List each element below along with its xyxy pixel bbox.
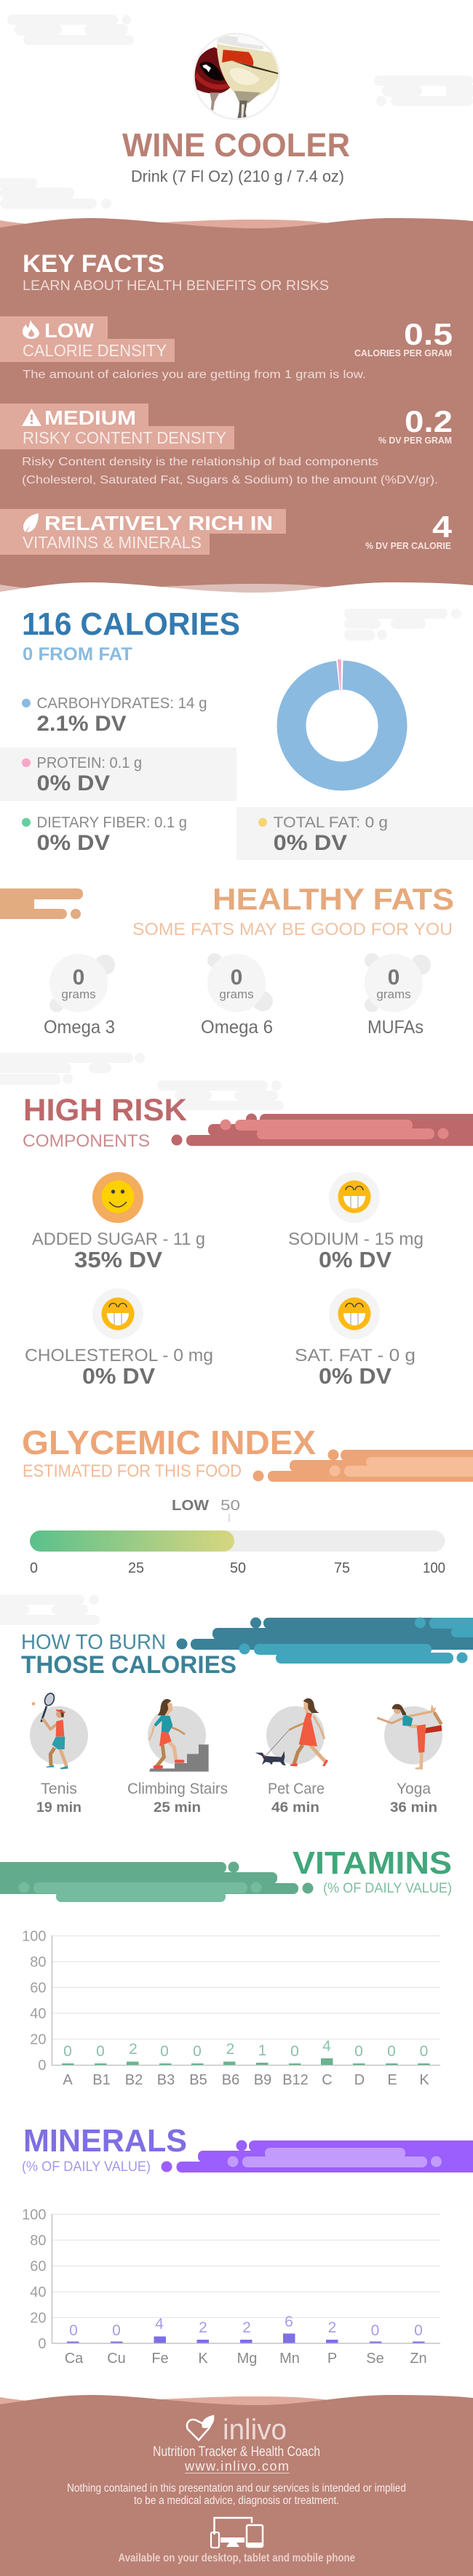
legend: protein: [0, 747, 236, 801]
legend: total fat: TOTAL FAT: 0 g: [274, 814, 388, 831]
panel: glycemic index: [22, 1424, 473, 1576]
cloud: high risk left: [0, 1053, 145, 1085]
cloud: left: [0, 178, 111, 209]
bar chart: minerals: 2: [242, 2319, 251, 2336]
activity: climbing stairs: [127, 1699, 228, 1815]
stat: mufas: MUFAs: [367, 1017, 424, 1038]
heading: vitamins: VITAMINS: [293, 1845, 452, 1881]
fact: calorie density: 0.5: [404, 317, 453, 351]
component: cholesterol: CHOLESTEROL - 0 mg: [25, 1346, 213, 1365]
legend: dietary fiber: [22, 814, 187, 855]
bar chart: vitamins: B3: [157, 2072, 175, 2088]
legend: dietary fiber: DIETARY FIBER: 0.1 g: [36, 814, 187, 831]
legend: carbohydrates: [22, 695, 207, 736]
fact: calorie density: CALORIE DENSITY: [23, 341, 167, 360]
gauge: glycemic index: 50: [230, 1560, 246, 1576]
activity: climbing stairs: 25 min: [154, 1800, 201, 1815]
legend: total fat: [236, 807, 473, 860]
subheading: from fat: 0 FROM FAT: [23, 644, 132, 665]
bar chart: minerals: K: [198, 2351, 208, 2367]
bar chart: vitamins: B9: [254, 2072, 271, 2088]
legend: dietary fiber: 0% DV: [36, 831, 110, 855]
bar chart: vitamins: B2: [125, 2072, 143, 2088]
gauge: glycemic index: LOW: [172, 1498, 209, 1514]
subheading: ESTIMATED FOR THIS FOOD: [23, 1461, 242, 1481]
panel: key facts: [0, 218, 473, 598]
bar chart: minerals: P: [327, 2351, 337, 2367]
panel: calories: [0, 606, 473, 860]
heading: calories: 116 CALORIES: [22, 606, 240, 642]
bar chart: vitamins: B12: [282, 2072, 309, 2088]
stat: omega 3: Omega 3: [44, 1017, 115, 1038]
fact: vitamins and minerals: VITAMINS & MINERALS: [23, 533, 202, 552]
subheading: SOME FATS MAY BE GOOD FOR YOU: [132, 920, 453, 939]
fact: risky content density: Risky Content density is the relationship of bad components: [22, 456, 378, 468]
component: sodium: 0% DV: [319, 1247, 391, 1272]
disclaimer: to be a medical advice, diagnosis or treatment.: [134, 2495, 339, 2507]
legend: protein: PROTEIN: 0.1 g: [36, 755, 142, 771]
activity: pet care: 46 min: [271, 1800, 319, 1815]
stat: mufas: [365, 953, 431, 1038]
bar chart: minerals: Zn: [410, 2351, 427, 2367]
banner: vitamins: [0, 1861, 313, 1902]
availability note: Available on your desktop, tablet and mobile phone: [118, 2552, 355, 2564]
logo: inlivo: inlivo: [223, 2414, 287, 2446]
activity: tennis: Tenis: [41, 1781, 77, 1797]
heading: minerals: MINERALS: [23, 2123, 187, 2159]
activity: yoga: [377, 1704, 442, 1815]
fact: risky content density: MEDIUM: [44, 406, 136, 429]
banner: high risk: [172, 1114, 473, 1146]
bar chart: minerals: Mn: [279, 2351, 300, 2367]
banner: healthy fats: [0, 888, 83, 919]
component: added sugar: ADDED SUGAR - 11 g: [32, 1229, 205, 1249]
bar chart: vitamins: 0: [387, 2043, 396, 2060]
stat: mufas: grams: [376, 987, 411, 1001]
fact: risky content density: (Cholesterol, Saturated Fat, Sugars & Sodium) to the amount (%DV/gr).: [22, 474, 438, 486]
bar chart: vitamins: E: [387, 2072, 397, 2088]
bar chart: vitamins: 4: [322, 2038, 331, 2055]
bar chart: vitamins: 0: [160, 2043, 169, 2060]
bar chart: vitamins: B5: [189, 2072, 207, 2088]
bar chart: minerals: 0: [38, 2336, 47, 2352]
chart: macronutrient donut: [291, 659, 393, 777]
bar chart: vitamins: 0: [290, 2043, 299, 2060]
bar chart: minerals: 2: [328, 2319, 336, 2336]
icon: devices: [211, 2518, 263, 2548]
subheading: daily value: (% OF DAILY VALUE): [323, 1881, 452, 1896]
bar chart: vitamins: 100: [22, 1928, 47, 1944]
legend: carbohydrates: 2.1% DV: [36, 712, 127, 736]
cloud: calories: [344, 609, 461, 641]
bar chart: minerals: 0: [371, 2322, 379, 2339]
illustration: woman on stairs: [148, 1699, 209, 1772]
bar chart: vitamins: [22, 1928, 440, 2088]
bar chart: minerals: 60: [30, 2258, 47, 2274]
fact: risky content density: [0, 404, 453, 486]
illustration: woman in yoga pose: [377, 1704, 442, 1770]
serving size: Drink (7 Fl Oz) (210 g / 7.4 oz): [131, 167, 344, 185]
heading: how to burn: HOW TO BURN: [21, 1631, 166, 1654]
stat: mufas: 0: [388, 966, 400, 990]
illustration: woman walking dog: [255, 1698, 328, 1766]
title: WINE COOLER: [122, 127, 350, 164]
bar chart: minerals: Ca: [65, 2351, 84, 2367]
activity: tennis: 19 min: [36, 1800, 82, 1815]
component: saturated fat: 0% DV: [319, 1363, 391, 1389]
bar chart: minerals: 100: [22, 2207, 47, 2223]
subheading: components: COMPONENTS: [23, 1131, 150, 1151]
bar chart: minerals: 0: [414, 2322, 423, 2339]
legend: carbohydrates: CARBOHYDRATES: 14 g: [36, 695, 207, 712]
illustration: tennis player: [30, 1692, 88, 1769]
bar chart: vitamins: 0: [193, 2043, 202, 2060]
activity: pet care: Pet Care: [268, 1781, 325, 1797]
activity: pet care: [255, 1698, 328, 1815]
gauge: glycemic index: 100: [423, 1560, 445, 1576]
bar chart: vitamins: C: [322, 2072, 333, 2088]
icon: leaf: [23, 513, 39, 532]
fact: vitamins and minerals: 4: [432, 510, 453, 544]
icon: flame: [23, 320, 39, 339]
legend: protein: 0% DV: [36, 771, 110, 795]
component: saturated fat: SAT. FAT - 0 g: [295, 1346, 416, 1365]
fact: calorie density: The amount of calories you are getting from 1 gram is low.: [23, 369, 366, 381]
bar chart: vitamins: 1: [258, 2042, 266, 2059]
fact: risky content density: 0.2: [405, 404, 453, 438]
icon: grin: [338, 1297, 371, 1331]
fact: vitamins and minerals: [0, 509, 453, 555]
component: cholesterol: [25, 1288, 213, 1389]
cloud: top right: [374, 76, 473, 106]
stat: omega 6: Omega 6: [201, 1017, 273, 1038]
gauge: glycemic index: 25: [128, 1560, 144, 1576]
food photo: wine glasses: [193, 33, 280, 120]
panel: footer: [0, 2395, 473, 2576]
component: sodium: SODIUM - 15 mg: [288, 1229, 424, 1249]
stat: omega 3: 0: [73, 966, 84, 990]
bar chart: vitamins: 0: [38, 2058, 47, 2074]
icon: grin: [338, 1181, 371, 1213]
fact: vitamins and minerals: RELATIVELY RICH IN: [44, 512, 273, 534]
bar chart: minerals: 4: [155, 2316, 164, 2332]
bar chart: vitamins: 0: [420, 2043, 428, 2060]
icon: inlivo heart: [187, 2416, 213, 2440]
bar chart: vitamins: A: [63, 2072, 73, 2088]
disclaimer: [67, 2482, 406, 2507]
heading: healthy fats: HEALTHY FATS: [212, 882, 454, 916]
activity: yoga: Yoga: [397, 1781, 431, 1797]
bar chart: minerals: [22, 2207, 440, 2367]
activity: yoga: 36 min: [390, 1800, 437, 1815]
bar chart: vitamins: 20: [30, 2031, 47, 2047]
fact: calorie density: [0, 316, 453, 381]
activity: climbing stairs: Climbing Stairs: [127, 1781, 228, 1797]
fact: vitamins and minerals: % DV PER CALORIE: [365, 540, 451, 551]
legend: total fat: 0% DV: [274, 831, 347, 855]
tagline: Nutrition Tracker & Health Coach: [153, 2444, 320, 2460]
component: added sugar: [32, 1172, 205, 1272]
header: [0, 15, 473, 209]
component: sodium: [288, 1172, 424, 1272]
fact: risky content density: % DV PER GRAM: [378, 435, 452, 446]
banner: burn: [176, 1617, 473, 1664]
bar chart: minerals: 6: [285, 2314, 293, 2330]
panel: high risk components: [0, 1053, 473, 1389]
bar chart: minerals: Se: [366, 2351, 384, 2367]
cloud: high risk right: [157, 1080, 284, 1110]
bar chart: minerals: 0: [69, 2322, 78, 2339]
icon: grin: [102, 1297, 134, 1331]
bar chart: vitamins: 0: [63, 2043, 72, 2060]
fact: calorie density: CALORIES PER GRAM: [354, 348, 452, 358]
bar chart: vitamins: B1: [92, 2072, 111, 2088]
stat: omega 6: grams: [219, 987, 254, 1001]
bar chart: minerals: 80: [30, 2233, 47, 2249]
heading: glycemic index: GLYCEMIC INDEX: [22, 1424, 316, 1461]
gauge: glycemic index: 75: [334, 1560, 350, 1576]
stat: omega 3: grams: [61, 987, 96, 1001]
bar chart: vitamins: 0: [354, 2043, 363, 2060]
panel: burn calories: [0, 1594, 473, 1815]
bar chart: minerals: 2: [199, 2319, 207, 2336]
bar chart: vitamins: 2: [129, 2041, 138, 2058]
gauge: glycemic index: [30, 1498, 445, 1576]
bar chart: vitamins: B6: [222, 2072, 239, 2088]
component: added sugar: 35% DV: [74, 1247, 162, 1272]
disclaimer: Nothing contained in this presentation and our services is intended or implied: [67, 2482, 406, 2495]
bar chart: vitamins: 2: [226, 2041, 234, 2058]
bar chart: vitamins: K: [419, 2072, 429, 2088]
bar chart: minerals: 20: [30, 2311, 47, 2327]
bar chart: minerals: 0: [112, 2322, 121, 2339]
cloud: top left: [7, 15, 134, 45]
bar chart: vitamins: 80: [30, 1954, 47, 1970]
fact: calorie density: LOW: [44, 319, 95, 342]
panel: minerals: [22, 2123, 473, 2367]
component: saturated fat: [295, 1288, 416, 1389]
bar chart: vitamins: 60: [30, 1981, 47, 1997]
banner: minerals: [162, 2140, 473, 2172]
bar chart: minerals: Fe: [151, 2351, 169, 2367]
stat: omega 3: [44, 954, 115, 1038]
fact: risky content density: RISKY CONTENT DENSITY: [23, 428, 226, 447]
website: www.inlivo.com: [184, 2459, 289, 2473]
bar chart: minerals: 40: [30, 2284, 47, 2300]
icon: warning: [22, 409, 41, 426]
heading: high risk: HIGH RISK: [23, 1093, 187, 1128]
subheading: LEARN ABOUT HEALTH BENEFITS OR RISKS: [23, 278, 329, 294]
component: cholesterol: 0% DV: [82, 1363, 155, 1389]
banner: glycemic index: [253, 1450, 473, 1482]
stat: omega 6: [201, 953, 273, 1038]
bar chart: minerals: Mg: [237, 2351, 257, 2367]
gauge: glycemic index: 50: [220, 1498, 240, 1514]
gauge: glycemic index: 0: [30, 1560, 38, 1576]
cloud: burn: [0, 1594, 100, 1625]
bar chart: vitamins: 0: [96, 2043, 105, 2060]
subheading: daily value: (% OF DAILY VALUE): [22, 2159, 151, 2175]
bar chart: minerals: Cu: [107, 2351, 126, 2367]
heading: those calories: THOSE CALORIES: [21, 1651, 236, 1679]
stat: omega 6: 0: [231, 966, 242, 990]
bar chart: vitamins: 40: [30, 2006, 47, 2022]
bar chart: vitamins: D: [354, 2072, 365, 2088]
panel: vitamins: [0, 1845, 452, 2088]
panel: healthy fats: [0, 882, 454, 1038]
icon: smile: [102, 1181, 134, 1213]
activity: tennis: [30, 1692, 88, 1815]
heading: key facts: KEY FACTS: [23, 250, 164, 278]
